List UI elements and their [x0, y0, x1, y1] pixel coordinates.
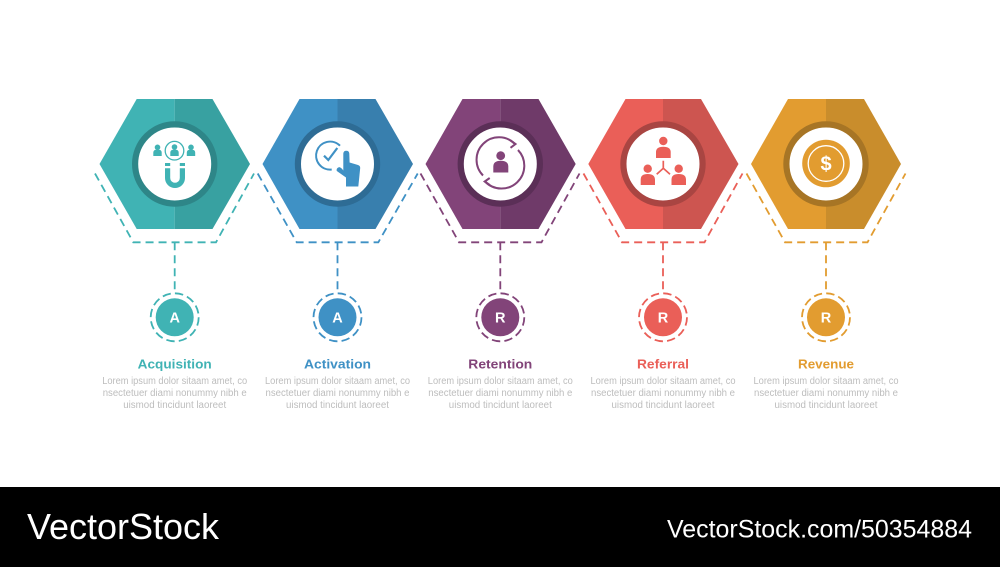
text block: Activation: uismod tincidunt laoreet	[286, 400, 389, 411]
badge: A	[151, 293, 199, 341]
heading: Acquisition: Acquisition	[138, 356, 212, 372]
badge: A: A	[169, 310, 180, 326]
badge: A	[314, 293, 362, 341]
badge: R: R	[658, 310, 669, 326]
panel: Referral	[584, 99, 742, 411]
footer: watermark bar: VectorStock	[27, 506, 220, 547]
text block: Referral: uismod tincidunt laoreet	[612, 400, 715, 411]
icon: tap with check mark	[316, 142, 360, 186]
text block: Activation: Lorem ipsum dolor sitaam amet, co	[265, 376, 410, 387]
hexagon: Activation	[262, 99, 413, 229]
text block: Referral: nsectetuer diami nonummy nibh e	[591, 388, 735, 399]
icon: referral network of people	[641, 137, 686, 185]
text block: Retention: Lorem ipsum dolor sitaam amet, co	[428, 376, 573, 387]
text block: Referral: Lorem ipsum dolor sitaam amet, co	[590, 376, 736, 387]
connector: dashed outline and stem	[420, 174, 580, 293]
connector: dashed outline and stem	[258, 174, 418, 293]
icon: dollar coin	[802, 140, 850, 187]
text block: Acquisition	[102, 376, 248, 411]
connector: dashed outline and stem	[95, 174, 254, 293]
hexagon: Retention	[426, 99, 576, 229]
connector: dashed outline and stem	[746, 174, 906, 293]
icon: people and magnet	[153, 141, 195, 188]
connector: dashed outline and stem	[584, 174, 742, 293]
heading: Retention: Retention	[468, 356, 532, 372]
footer: watermark bar	[0, 487, 1000, 567]
text block: Activation	[265, 376, 410, 411]
panel: Acquisition	[95, 99, 254, 411]
text block: Revenue	[754, 376, 899, 411]
text block: Acquisition: uismod tincidunt laoreet	[123, 400, 226, 411]
badge: R: R	[821, 310, 832, 326]
badge: R	[476, 293, 524, 341]
hexagon: Acquisition	[100, 99, 250, 229]
hexagon: Referral	[588, 99, 738, 229]
text block: Revenue: nsectetuer diami nonummy nibh e	[754, 388, 898, 399]
badge: R: R	[495, 310, 506, 326]
heading: Activation: Activation	[304, 356, 371, 372]
panel: Revenue	[746, 99, 906, 411]
text block: Referral	[590, 376, 736, 411]
heading: Referral: Referral	[637, 356, 689, 372]
badge: A: A	[332, 310, 343, 326]
text block: Revenue: uismod tincidunt laoreet	[774, 400, 878, 411]
badge: R	[639, 293, 687, 341]
text block: Revenue: Lorem ipsum dolor sitaam amet, co	[754, 376, 899, 387]
footer: watermark bar: VectorStock.com/50354884	[667, 516, 972, 544]
text block: Acquisition: Lorem ipsum dolor sitaam amet, co	[102, 376, 248, 387]
icon: person in rotating arrows	[477, 137, 524, 189]
text block: Acquisition: nsectetuer diami nonummy nibh e	[103, 388, 247, 399]
text block: Retention: nsectetuer diami nonummy nibh e	[428, 388, 573, 399]
icon: dollar coin: $	[820, 154, 832, 176]
badge: R	[802, 293, 850, 341]
text block: Retention: uismod tincidunt laoreet	[449, 400, 552, 411]
panel: Retention	[420, 99, 580, 411]
text block: Retention	[428, 376, 573, 411]
heading: Revenue: Revenue	[798, 356, 854, 372]
hexagon: Revenue	[751, 99, 901, 229]
text block: Activation: nsectetuer diami nonummy nibh e	[266, 388, 410, 399]
panel: Activation	[258, 99, 418, 411]
